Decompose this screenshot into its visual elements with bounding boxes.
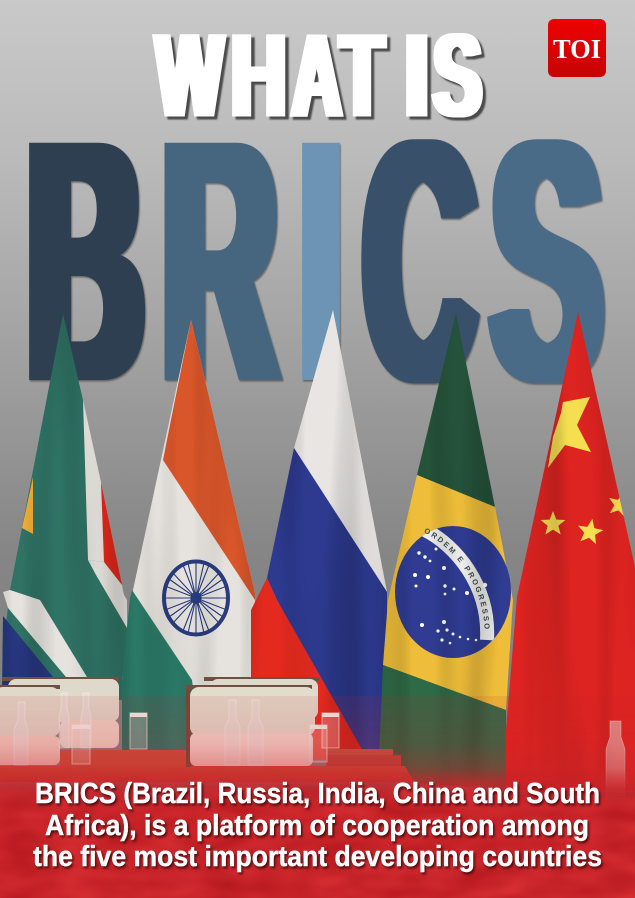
description text (33, 778, 602, 873)
flag: Brazil (379, 314, 513, 788)
stars of Brazil flag (413, 548, 487, 644)
description text: Africa), is a platform of cooperation among (45, 810, 589, 842)
heading: WHAT IS: S (433, 9, 482, 141)
glasses (72, 713, 339, 764)
letter B: B (28, 70, 143, 452)
heading: WHAT IS: T (340, 10, 384, 141)
right chair front (186, 685, 315, 767)
heading: WHAT IS: A (292, 11, 341, 142)
heading: WHAT IS: W (156, 9, 223, 141)
heading: WHAT IS: H (231, 10, 286, 142)
description text: the five most important developing countries (33, 841, 602, 873)
logo: TOI badge: TOI (553, 34, 601, 64)
letter S: S (492, 69, 601, 452)
red fading overlay (0, 696, 635, 811)
motto text: ORDEM E PROGRESSO (424, 528, 490, 629)
flag: India (122, 320, 255, 780)
flags row (2, 310, 635, 790)
mottled red floor (0, 770, 635, 898)
right chair back (204, 677, 320, 719)
icon: Ashoka chakra (164, 562, 228, 634)
table tiers (0, 749, 414, 782)
bottles (14, 693, 625, 799)
letter C: C (364, 71, 475, 453)
flag: China (506, 312, 635, 790)
letter I: I (301, 70, 341, 452)
heading: WHAT IS (156, 9, 482, 142)
small yellow stars (540, 498, 624, 544)
flag: Russia (251, 310, 387, 760)
large yellow star (548, 397, 591, 468)
left chair front (0, 685, 60, 765)
heading: WHAT IS: I (405, 9, 429, 141)
globe of Brazil flag (395, 526, 511, 658)
logo: TOI badge (548, 19, 606, 77)
letter R: R (163, 71, 277, 452)
glass lids (72, 713, 339, 729)
left chair back (2, 677, 119, 748)
heading: BRICS large letters (28, 69, 601, 453)
conference table and chairs (0, 677, 625, 799)
flag: South Africa (2, 314, 130, 700)
